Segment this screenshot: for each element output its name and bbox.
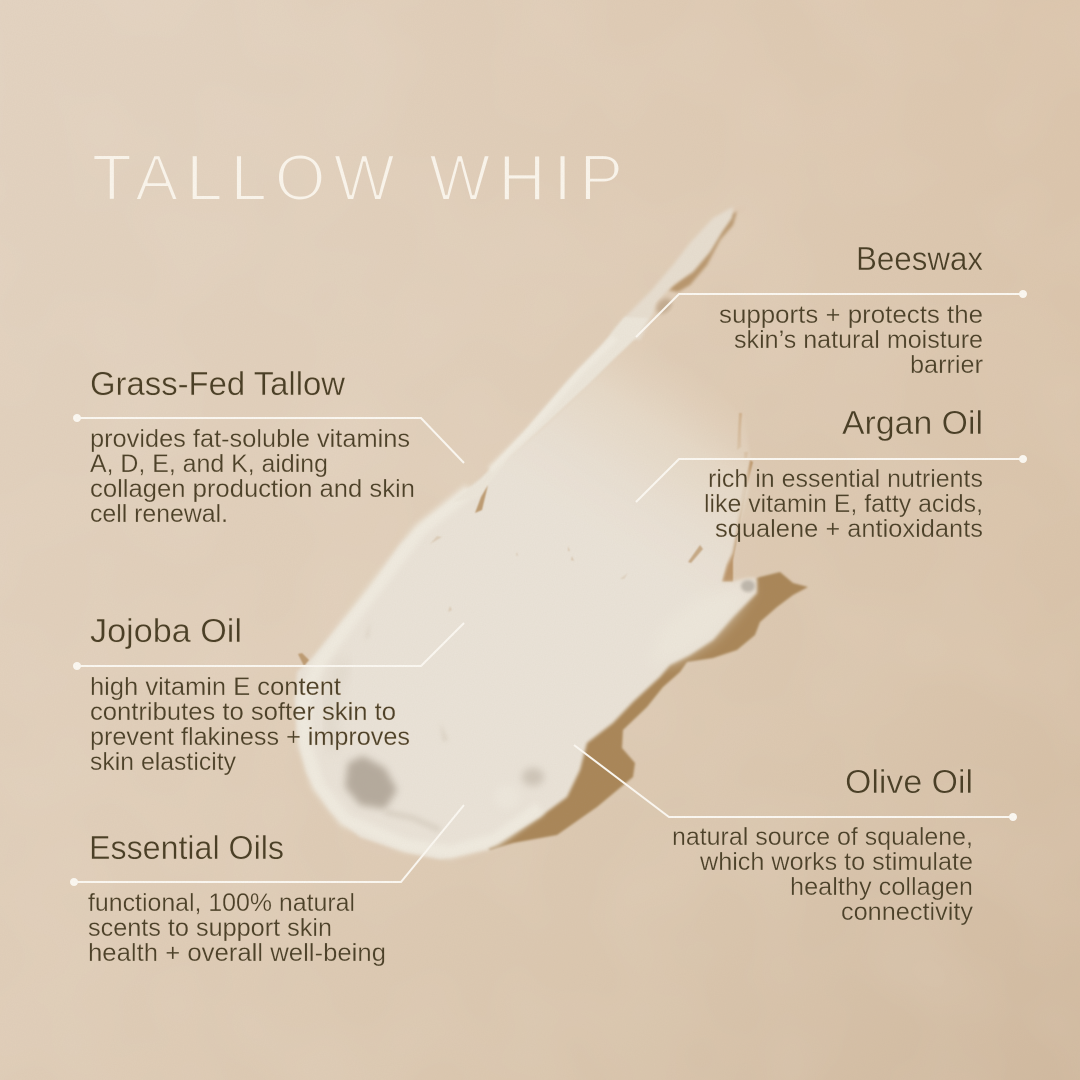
callout: Beeswax (636, 240, 1027, 379)
description: natural source of squalene, (672, 823, 973, 851)
description: healthy collagen (790, 873, 973, 901)
description: prevent flakiness + improves (90, 723, 410, 751)
description: cell renewal. (90, 500, 228, 528)
description: contributes to softer skin to (90, 698, 396, 726)
cream smear photo (295, 207, 808, 859)
leader line (73, 414, 464, 463)
description: connectivity (841, 898, 973, 926)
heading: Beeswax (856, 240, 983, 277)
soft inner shade beside the rim (330, 660, 345, 750)
bright crest in the lower strip (490, 338, 615, 470)
description: scents to support skin (88, 914, 332, 942)
heading: Argan Oil (842, 404, 983, 441)
leader line (574, 745, 1017, 821)
thin upper strip of cream, soft end (610, 207, 733, 340)
description (90, 673, 410, 776)
second faint hollow lower edge (522, 768, 544, 786)
callout: Essential Oils (70, 805, 464, 967)
description: health + overall well-being (88, 939, 386, 967)
description (88, 889, 386, 967)
description: like vitamin E, fatty acids, (704, 490, 983, 518)
shadow of the thin strip (668, 207, 745, 292)
heading: Essential Oils (89, 829, 284, 866)
crack running through the upper right of the smear (721, 413, 753, 582)
title: TALLOW WHIP (92, 141, 623, 214)
grey dimple at arm tip (741, 580, 755, 592)
description: provides fat-soluble vitamins (90, 425, 410, 453)
heading: Jojoba Oil (90, 612, 242, 649)
callout: Argan Oil (636, 404, 1027, 543)
main cream body (295, 312, 757, 859)
heading: Olive Oil (845, 763, 973, 800)
pale surface dents (365, 620, 448, 742)
description (719, 301, 983, 379)
description: skin elasticity (90, 748, 236, 776)
bright lump lower edge (494, 785, 520, 809)
description: functional, 100% natural (88, 889, 355, 917)
thin lower strip of cream (452, 317, 648, 502)
heading: Grass-Fed Tallow (90, 365, 345, 402)
description: supports + protects the (719, 301, 983, 329)
callout: Grass-Fed Tallow (73, 365, 464, 528)
description: skin’s natural moisture (734, 326, 983, 354)
cast shadow of the smear (480, 572, 808, 850)
small cracks and specks (298, 485, 703, 666)
description (672, 823, 973, 926)
description: A, D, E, and K, aiding (90, 450, 328, 478)
bright arm at the right end (650, 586, 752, 665)
callout: Olive Oil (574, 745, 1017, 926)
leader line (70, 805, 464, 886)
description: high vitamin E content (90, 673, 341, 701)
description: rich in essential nutrients (708, 465, 983, 493)
description: squalene + antioxidants (715, 515, 983, 543)
crease beyond the hollow (385, 812, 440, 830)
bright rim along the left and lower edge (304, 490, 540, 852)
leader line (636, 455, 1027, 502)
grey hollow lower left (345, 756, 397, 809)
callout: Jojoba Oil (73, 612, 464, 776)
description: collagen production and skin (90, 475, 415, 503)
description (90, 425, 415, 528)
description: which works to stimulate (699, 848, 973, 876)
soft brown-grey shadow in the strip (653, 295, 675, 317)
description (704, 465, 983, 543)
description: barrier (910, 351, 983, 379)
leader line (73, 623, 464, 670)
leader line (636, 290, 1027, 337)
